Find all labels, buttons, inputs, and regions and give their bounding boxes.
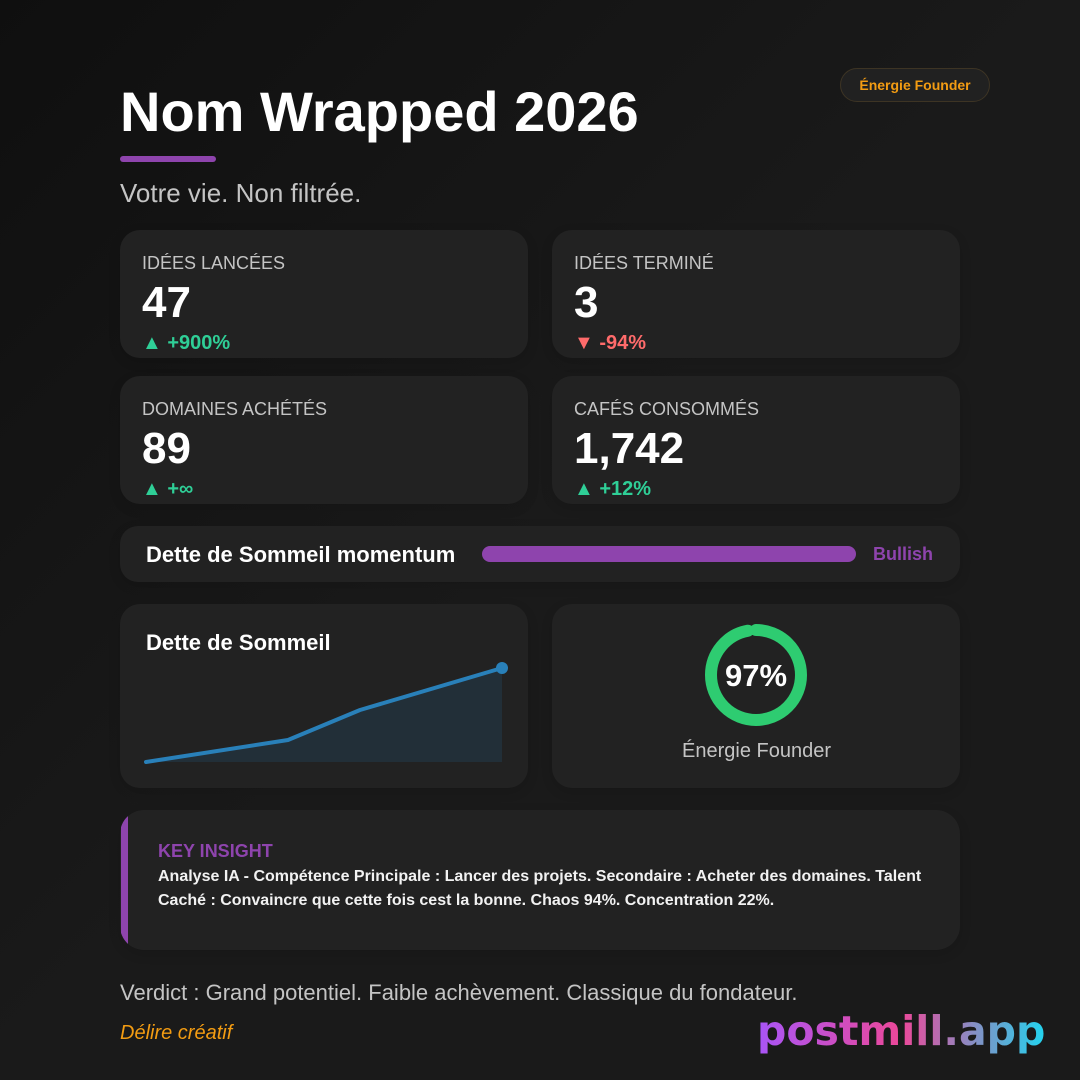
panel: key insight	[120, 810, 960, 950]
subtitle: Votre vie. Non filtrée.	[120, 178, 361, 208]
title accent bar	[120, 156, 216, 162]
label: IDÉES LANCÉES	[142, 253, 285, 273]
footer tagline: Délire créatif	[120, 1022, 232, 1044]
label: IDÉES TERMINÉ	[574, 253, 714, 273]
change: ▼ -94%	[574, 332, 646, 354]
insight accent bar	[121, 810, 128, 950]
title: Nom Wrapped 2026	[120, 80, 639, 143]
panel: momentum	[120, 526, 960, 582]
verdict: Verdict : Grand potentiel. Faible achèvement. Classique du fondateur.	[120, 980, 798, 1005]
panel: line chart	[120, 604, 528, 788]
change: ▲ +12%	[574, 478, 651, 500]
value: 1,742	[574, 424, 684, 473]
line chart	[144, 662, 508, 764]
badge: Énergie Founder: Énergie Founder	[859, 77, 971, 93]
value: 89	[142, 424, 191, 473]
insight text: Analyse IA - Compétence Principale : Lancer des projets. Secondaire : Acheter des domaines. Talent Caché : Convaincre que cette fois cest la bonne. Chaos 94%. Concentration 22%.	[158, 868, 921, 909]
value: 3	[574, 278, 598, 327]
panel: donut	[552, 604, 960, 788]
logo: postmill.app: postmill.app	[757, 1007, 1045, 1055]
momentum label: Dette de Sommeil momentum	[146, 542, 455, 567]
momentum status: Bullish	[873, 544, 933, 564]
change: ▲ +∞	[142, 478, 193, 500]
panel: idées lancées	[120, 230, 528, 358]
value: 47	[142, 278, 191, 327]
label: DOMAINES ACHÉTÉS	[142, 399, 327, 419]
panel: domaines achétés	[120, 376, 528, 504]
badge: Énergie Founder	[840, 68, 990, 102]
chart title: Dette de Sommeil	[146, 630, 331, 655]
change: ▲ +900%	[142, 332, 230, 354]
insight heading: KEY INSIGHT	[158, 841, 273, 861]
donut value: 97%	[725, 658, 787, 693]
label: CAFÉS CONSOMMÉS	[574, 399, 759, 419]
donut caption: Énergie Founder	[682, 740, 831, 762]
donut ring	[705, 624, 807, 726]
momentum bar	[482, 546, 856, 562]
panel: cafés consommés	[552, 376, 960, 504]
panel: idées terminé	[552, 230, 960, 358]
